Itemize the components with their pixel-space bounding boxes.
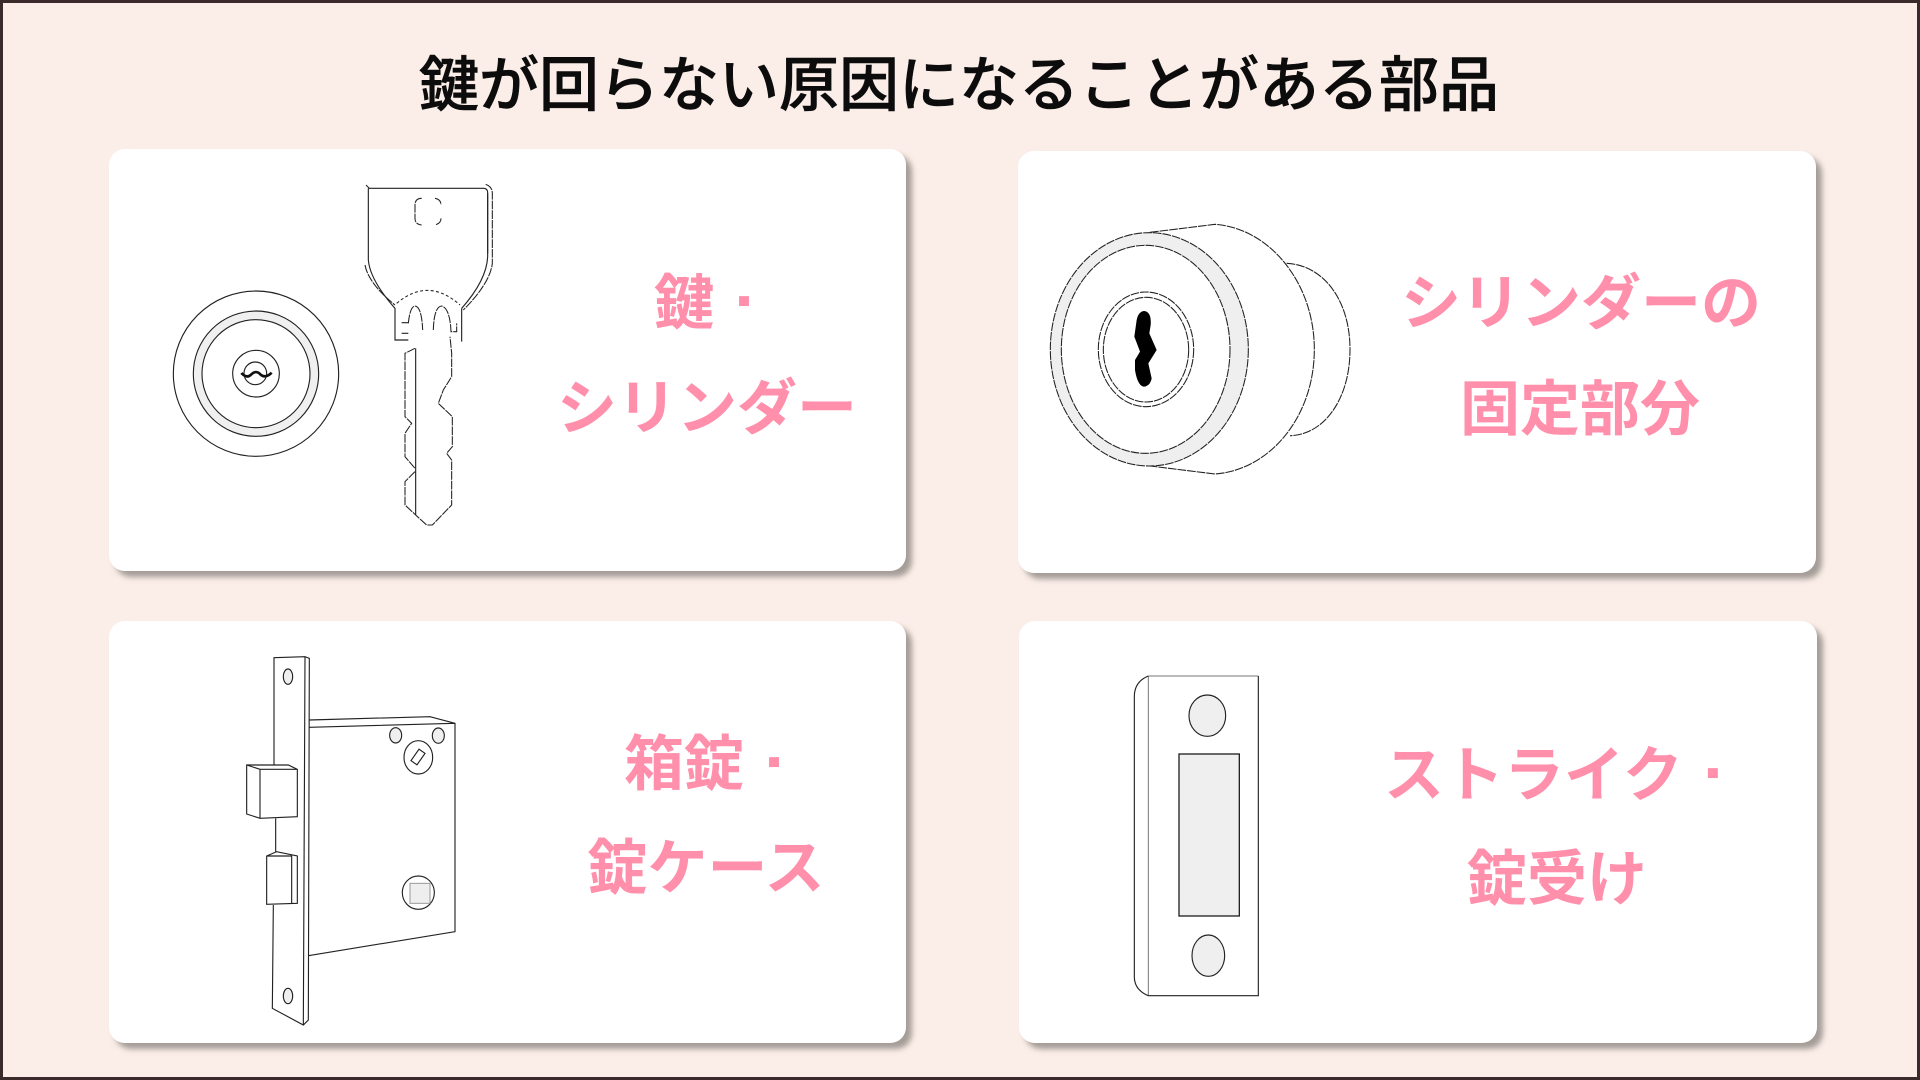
panel: key and cylinder	[109, 149, 906, 571]
label: strike plate: 錠受け	[1467, 846, 1647, 913]
panel: cylinder fixing part	[1018, 151, 1816, 573]
label: mortise lock case: 箱錠・	[624, 731, 804, 798]
card background	[1019, 621, 1817, 1043]
label: key and cylinder: 鍵・	[654, 270, 774, 337]
label: strike plate	[1384, 742, 1743, 913]
title: 鍵が回らない原因になることがある部品	[419, 52, 1499, 119]
panel: mortise lock case	[109, 621, 906, 1043]
label: mortise lock case: 錠ケース	[588, 835, 824, 902]
icon: key	[365, 184, 492, 525]
card background	[109, 149, 906, 571]
label: cylinder fixing part	[1401, 270, 1761, 443]
label: strike plate: ストライク・	[1384, 742, 1743, 809]
icon: door knob cylinder	[1050, 224, 1350, 474]
icon: strike plate	[1134, 676, 1258, 996]
label: mortise lock case	[588, 731, 824, 902]
label: cylinder fixing part: 固定部分	[1460, 376, 1700, 443]
panel: strike plate	[1019, 621, 1817, 1043]
label: cylinder fixing part: シリンダーの	[1401, 270, 1761, 337]
card background	[1018, 151, 1816, 573]
label: key and cylinder	[557, 270, 857, 442]
icon: mortise lock	[247, 657, 455, 1025]
label: key and cylinder: シリンダー	[557, 375, 857, 442]
icon: cylinder front view	[173, 291, 339, 456]
card background	[109, 621, 906, 1043]
